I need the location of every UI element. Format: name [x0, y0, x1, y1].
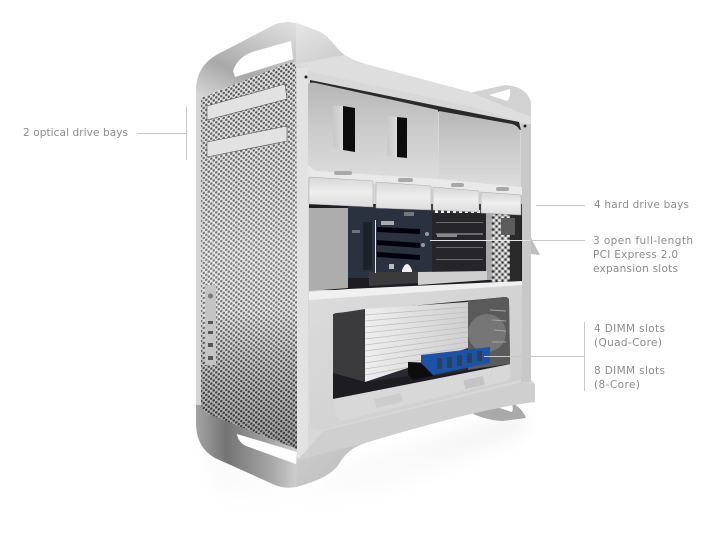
upper bay covers — [308, 80, 521, 186]
screw holes — [304, 76, 526, 128]
left cover — [308, 83, 438, 179]
front frame bottom arch — [196, 405, 365, 488]
perforated front panel — [201, 61, 297, 449]
callout: DIMM slots: (Quad-Core) — [594, 337, 662, 349]
black memory modules — [408, 362, 433, 380]
tower body — [196, 22, 535, 488]
blue memory modules — [421, 347, 490, 375]
right cover — [439, 111, 520, 186]
callout: DIMM slots: (8-Core) — [594, 379, 640, 391]
clamp — [369, 272, 418, 286]
base front band — [298, 382, 535, 460]
lower tray lip — [333, 365, 510, 420]
floor reflection — [205, 410, 525, 510]
callout: optical drive bays: 2 optical drive bays — [23, 127, 128, 139]
callout: DIMM slots: 8 DIMM slots — [594, 365, 665, 377]
heatsink white fins — [365, 302, 468, 382]
side panel frame — [296, 55, 535, 460]
silver divider — [486, 212, 492, 280]
left cutout — [333, 105, 355, 152]
right cutout — [387, 116, 407, 158]
front frame top arch — [196, 22, 365, 97]
top bar highlight — [296, 55, 531, 125]
hard drive bay strip — [308, 166, 522, 196]
callout: PCI Express slots: 3 open full-length — [593, 235, 693, 247]
card rail — [418, 271, 487, 285]
callout: PCI Express slots: expansion slots — [593, 263, 678, 275]
heatsink dark fins — [333, 309, 365, 382]
drive tray handles — [334, 171, 509, 191]
logic board — [348, 206, 432, 278]
callout: hard drive bays: 4 hard drive bays — [594, 199, 689, 211]
PCI bracket slots — [432, 210, 486, 271]
optical bay door upper — [207, 84, 287, 120]
right post — [521, 124, 531, 382]
memory window — [333, 297, 510, 399]
fan — [468, 297, 510, 372]
back foot — [466, 403, 526, 421]
middle expansion bay — [309, 204, 522, 291]
left silver block — [309, 208, 348, 291]
drive tray faces — [309, 177, 521, 215]
optical bay door lower — [207, 126, 287, 157]
front port panel — [205, 285, 216, 365]
perforated back wall — [492, 214, 510, 282]
rear dark component — [501, 214, 521, 282]
circuit board base — [333, 364, 510, 399]
left post — [297, 68, 308, 458]
tower computer — [196, 22, 540, 488]
callout: PCI Express slots — [376, 220, 693, 275]
callout: DIMM slots: 4 DIMM slots — [594, 323, 665, 335]
back handle — [465, 85, 531, 124]
callout: optical drive bays — [23, 107, 186, 160]
callout: PCI Express slots: PCI Express 2.0 — [593, 249, 678, 261]
rear bracket tab — [531, 238, 540, 255]
callout: DIMM slots — [484, 322, 665, 391]
lower bay — [309, 281, 522, 430]
